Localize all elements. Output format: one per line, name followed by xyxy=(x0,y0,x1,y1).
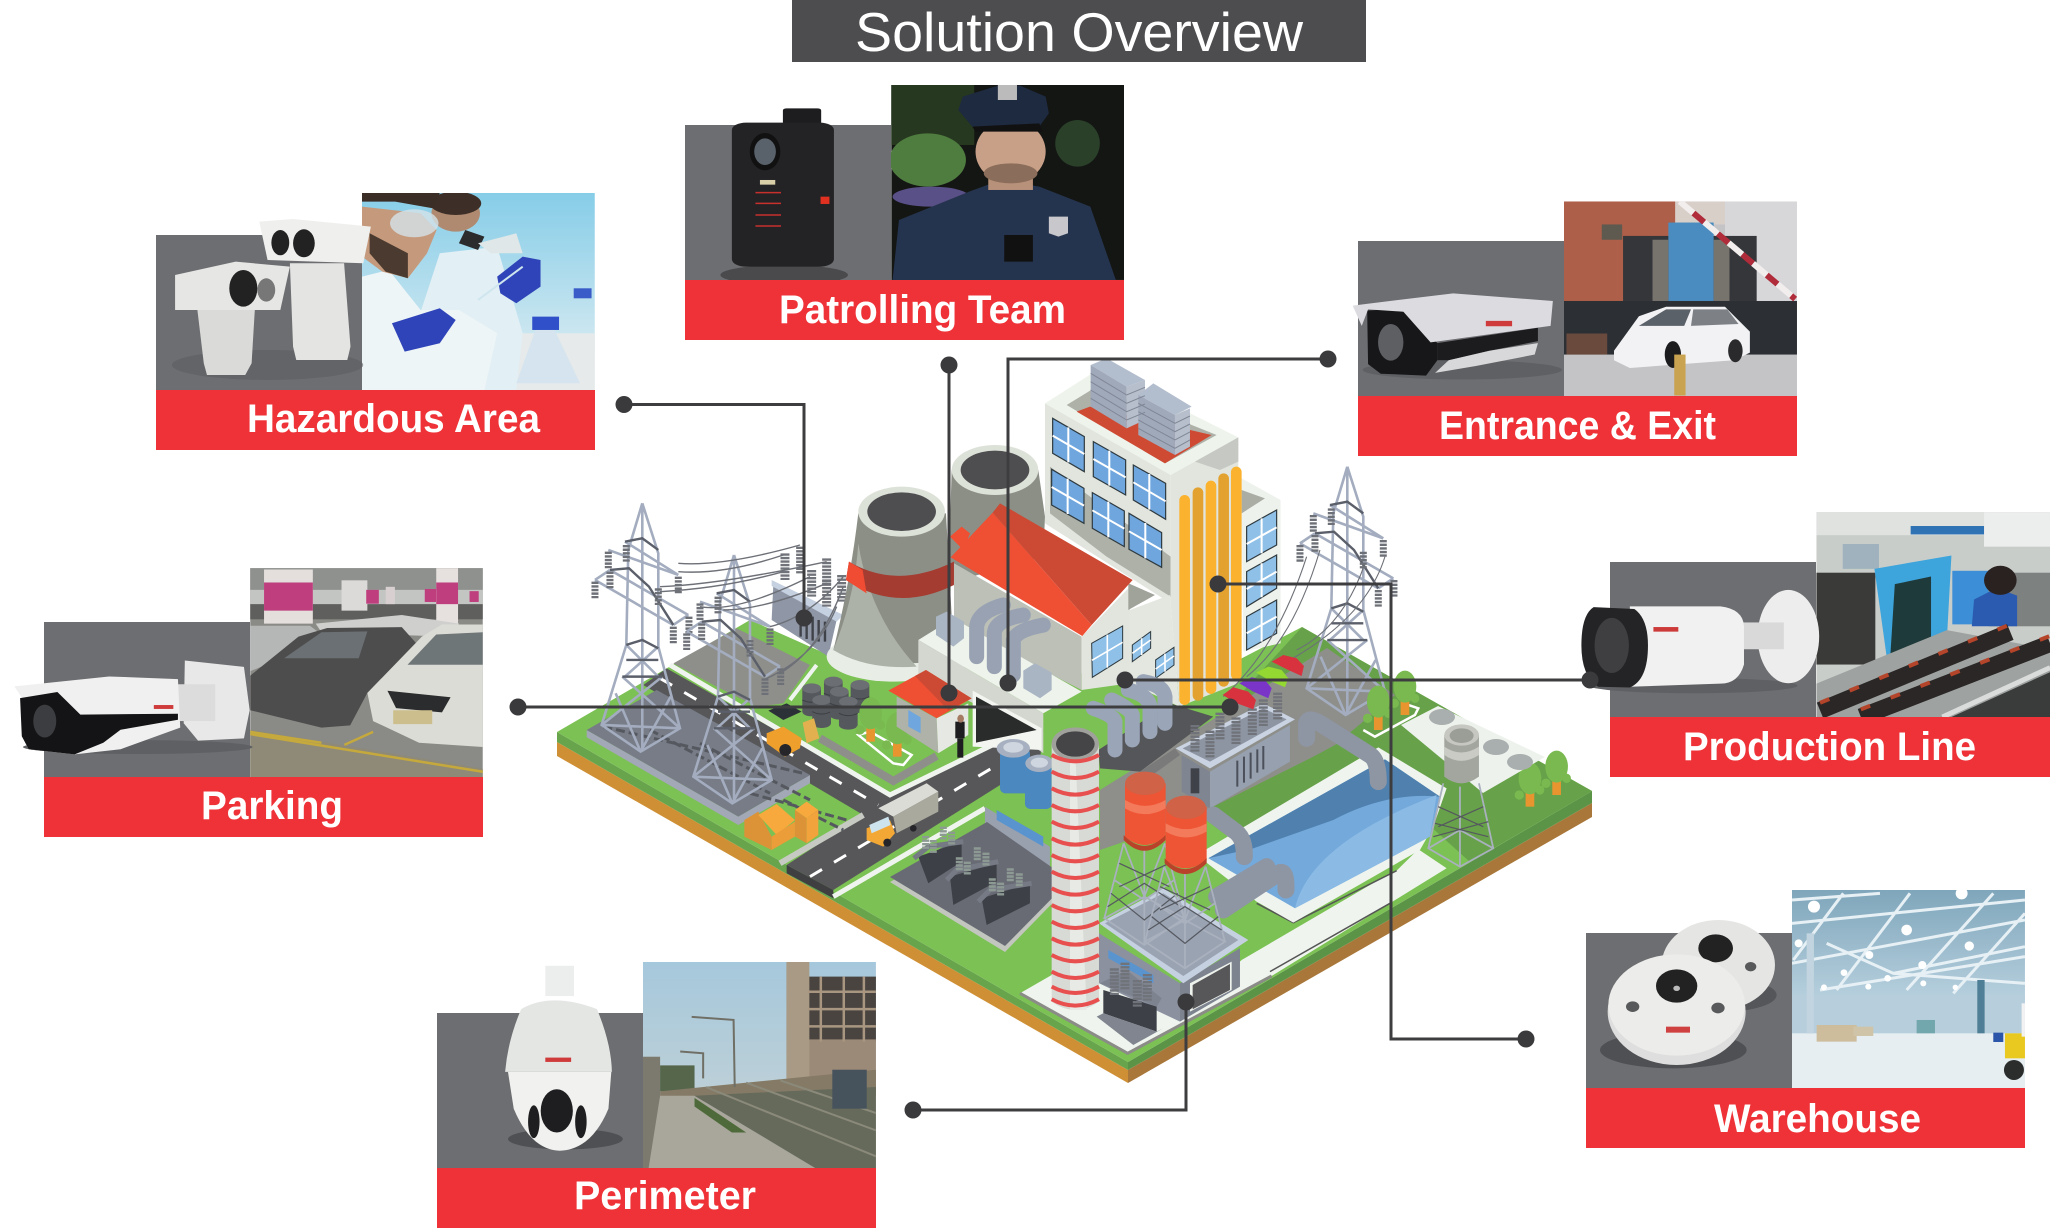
substation xyxy=(1097,888,1248,1045)
icon: bullet camera with mount xyxy=(14,660,253,754)
wires and objects on right xyxy=(1223,550,1385,709)
connector: production line xyxy=(1116,672,1598,688)
hanging wires xyxy=(1223,550,1385,697)
photo: parked cars xyxy=(250,568,483,777)
gate xyxy=(973,691,1042,750)
trees on right xyxy=(1363,671,1571,807)
substation box xyxy=(772,547,843,657)
left pylon xyxy=(595,503,689,752)
icon: bullet camera xyxy=(1581,590,1819,693)
boxes xyxy=(744,802,818,850)
panel: hazardous area xyxy=(156,192,595,450)
power wires xyxy=(660,545,843,680)
panel: perimeter xyxy=(437,962,876,1228)
panel: hazardous area: Hazardous Area xyxy=(247,397,541,441)
photo: perimeter fence xyxy=(643,962,876,1170)
second pylon xyxy=(687,555,781,803)
chimney xyxy=(1052,727,1099,1010)
panel: parking xyxy=(14,568,483,837)
panel: production line xyxy=(1581,512,2050,777)
red tanks and supports xyxy=(1104,772,1225,968)
connector: entrance and exit xyxy=(1000,350,1336,692)
right pylon xyxy=(1300,467,1394,715)
person xyxy=(955,715,965,758)
panel: warehouse: Warehouse xyxy=(1714,1097,1921,1141)
pool pipes xyxy=(1213,720,1378,910)
rooftop stacks xyxy=(1091,358,1192,455)
pool and concrete plinths xyxy=(1020,740,1447,1053)
panel: patrolling team: Patrolling Team xyxy=(779,288,1066,332)
upper left gravel pad xyxy=(673,628,810,707)
icon: thermal cameras xyxy=(172,219,371,380)
panel: parking: Parking xyxy=(201,784,343,828)
pylon pad xyxy=(587,690,847,830)
blue insulators xyxy=(997,739,1053,809)
road surface xyxy=(643,665,1043,898)
house yard objects xyxy=(767,670,1050,890)
panel: entrance and exit: Entrance & Exit xyxy=(1439,404,1716,448)
panel: perimeter: Perimeter xyxy=(574,1174,756,1218)
icon: body worn camera xyxy=(720,108,848,285)
icon: fisheye cameras xyxy=(1600,920,1777,1068)
connector: patrolling team xyxy=(940,356,958,702)
front cooling tower xyxy=(827,487,960,682)
connector: perimeter xyxy=(904,994,1194,1118)
forklift xyxy=(767,703,819,757)
truck xyxy=(867,783,938,847)
connector: warehouse xyxy=(1210,576,1534,1048)
right transformer xyxy=(1176,693,1295,808)
isometric factory illustration xyxy=(557,358,1592,1083)
hall xyxy=(950,503,1179,707)
photo: police officer xyxy=(889,85,1124,280)
trees xyxy=(855,697,912,765)
ducts xyxy=(977,605,1043,675)
photo: car at barrier xyxy=(1564,201,1797,397)
grey pumps xyxy=(1093,682,1165,750)
windows xyxy=(1052,418,1277,650)
vent blocks xyxy=(936,612,1052,698)
centre plant xyxy=(997,682,1378,1045)
photo: warehouse interior xyxy=(1792,887,2025,1088)
platform xyxy=(918,618,1082,753)
insulator building xyxy=(985,807,1050,890)
barrels xyxy=(802,677,869,730)
icon: PTZ dome camera xyxy=(505,966,623,1151)
panel: entrance and exit xyxy=(1353,201,1797,456)
yard xyxy=(1100,648,1395,850)
connector: parking xyxy=(510,698,1238,716)
yellow pipes xyxy=(1179,467,1242,705)
title: Solution Overview xyxy=(855,1,1303,63)
connector: hazardous area xyxy=(616,396,812,626)
photo: factory conveyor xyxy=(1816,512,2050,719)
photo: scientists in lab xyxy=(362,192,595,390)
panel: warehouse xyxy=(1586,887,2025,1148)
small house xyxy=(888,670,972,753)
icon: box camera xyxy=(1353,293,1562,379)
panel: patrolling team xyxy=(685,85,1124,340)
dark stairs xyxy=(1098,703,1213,772)
water tower xyxy=(1428,724,1493,867)
transformer pad xyxy=(890,822,1070,952)
cars xyxy=(1223,655,1304,709)
AC units xyxy=(1401,706,1545,793)
base platform xyxy=(557,620,1592,1083)
main building xyxy=(918,358,1281,753)
panel: production line: Production Line xyxy=(1683,725,1976,769)
left roads and pads xyxy=(587,547,1043,898)
rear cooling tower xyxy=(948,445,1045,583)
